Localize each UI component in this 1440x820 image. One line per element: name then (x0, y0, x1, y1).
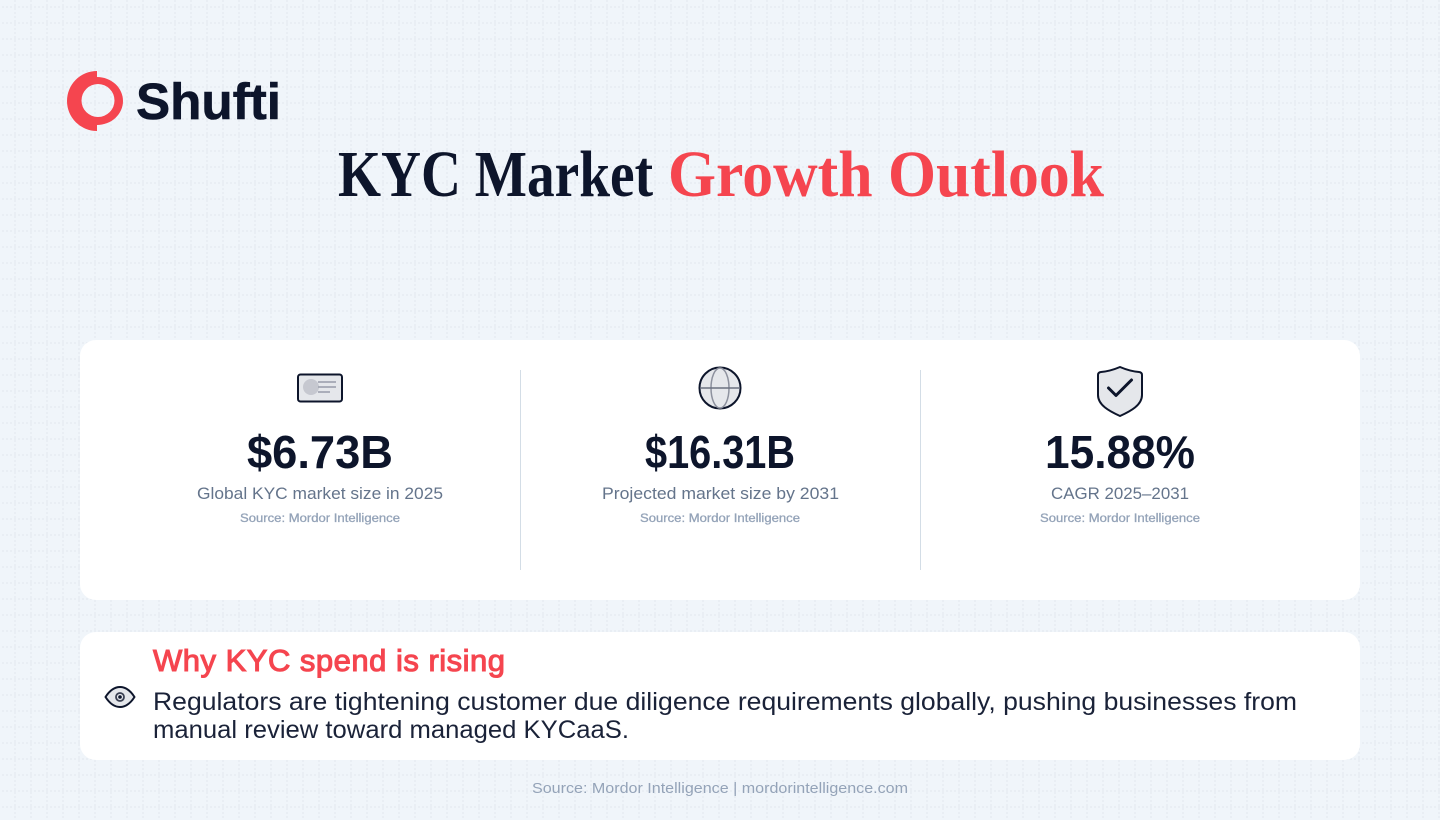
callout heading: Why KYC spend is rising (153, 643, 505, 678)
stat: CAGR (1040, 367, 1200, 525)
source: Source: Mordor Intelligence (640, 513, 800, 525)
callout body: Regulators are tightening customer due diligence requirements globally, pushing businesses from (153, 688, 1297, 716)
stat: 2025 market size (197, 374, 443, 525)
icon: eye (106, 687, 134, 707)
icon: globe (700, 368, 740, 408)
title: KYC Market (338, 138, 653, 211)
icon: shield check (1098, 367, 1142, 416)
value: 15.88% (1045, 426, 1195, 478)
panel: why KYC spend is rising (80, 632, 1360, 760)
source: Source: Mordor Intelligence (1040, 513, 1200, 525)
value: $16.31B (645, 426, 795, 478)
callout body: manual review toward managed KYCaaS. (153, 716, 629, 744)
label: CAGR 2025–2031 (1051, 484, 1189, 503)
logo wordmark: Shufti (136, 73, 281, 130)
logo: Shufti (67, 71, 281, 131)
label: Global KYC market size in 2025 (197, 484, 443, 503)
icon: ID card (298, 374, 342, 402)
footer source: Source: Mordor Intelligence | mordorintelligence.com (532, 780, 908, 797)
label: Projected market size by 2031 (602, 484, 839, 503)
title: Growth Outlook (668, 138, 1104, 211)
panel: market statistics (80, 340, 1360, 600)
source: Source: Mordor Intelligence (240, 513, 400, 525)
value: $6.73B (247, 426, 393, 478)
icon: logo ring (67, 71, 123, 131)
stat: 2031 projection (602, 368, 839, 525)
